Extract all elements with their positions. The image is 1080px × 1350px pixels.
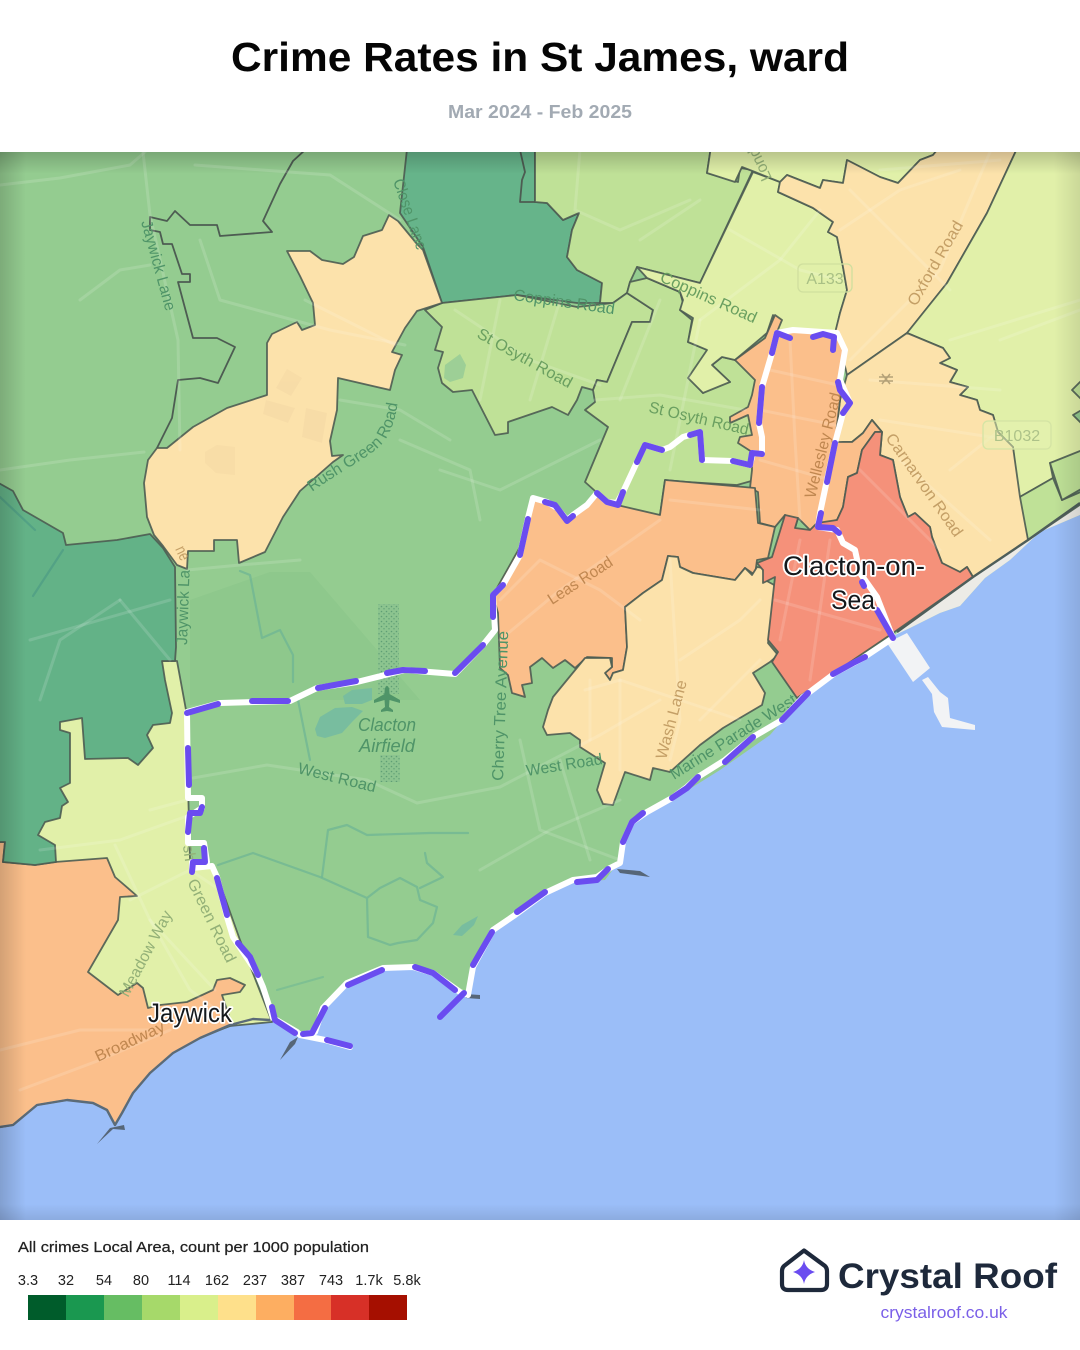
legend title: All crimes Local Area, count per 1000 population — [18, 1239, 369, 1256]
legend tick labels: 387 — [281, 1273, 305, 1289]
legend tick labels: 80 — [133, 1273, 149, 1289]
road shield: B1032 — [983, 421, 1051, 449]
place label: Clacton-on-Sea — [783, 551, 925, 615]
streams — [0, 497, 468, 990]
legend tick labels: 1.7k — [355, 1273, 383, 1289]
local roads — [0, 150, 1080, 1090]
road labels: Jaywick La — [174, 569, 194, 645]
pond — [453, 916, 478, 936]
cream field patches — [205, 369, 327, 475]
St Osyth pond — [444, 354, 466, 382]
icon: railway station — [879, 374, 893, 384]
region: Carnarvon Road cream — [835, 333, 1028, 577]
logo URL: crystalroof.co.uk — [880, 1304, 1008, 1322]
road labels: Oxford Road — [905, 218, 967, 309]
road shield: A133: A133 — [806, 271, 844, 288]
road shield: B1032: B1032 — [994, 428, 1040, 445]
icon: house with star — [782, 1250, 827, 1290]
road labels: West Road — [296, 760, 378, 796]
road labels: Broadway — [93, 1019, 168, 1066]
legend tick labels: 743 — [319, 1273, 343, 1289]
road labels: Leas Road — [545, 554, 616, 608]
airfield label: Airfield — [358, 736, 416, 756]
road labels: ne — [171, 544, 193, 563]
place label: Clacton-on-Sea: Clacton-on- — [783, 551, 925, 581]
region: Jaywick north yellow-green — [30, 661, 272, 1040]
legend — [18, 1239, 421, 1320]
road labels: sh — [179, 844, 198, 862]
legend tick labels — [18, 1273, 421, 1289]
region boundary lines — [0, 150, 1080, 1127]
road labels: Meadow Way — [117, 908, 176, 1000]
road labels: Rush Green Road — [306, 402, 398, 491]
region: east coast light green — [1018, 478, 1080, 540]
airfield field shading — [190, 572, 420, 705]
title: Crime Rates in St James, ward — [231, 34, 849, 80]
road labels: Carnarvon Road — [882, 431, 966, 540]
region: Rush Green cream — [144, 215, 442, 569]
airfield runway — [378, 604, 400, 782]
road labels — [94, 152, 964, 1062]
region: east yellow-green — [907, 140, 1080, 498]
road labels: Close Lane — [389, 177, 429, 252]
ward boundary: St James — [187, 330, 893, 1047]
region: St Osyth Road west light green — [425, 293, 653, 435]
region: Wellesley Road orange — [730, 315, 882, 530]
legend colour scale — [28, 1295, 407, 1320]
legend tick labels: 237 — [243, 1273, 267, 1289]
region: north dark green — [400, 140, 602, 303]
place label: Jaywick: Jaywick — [148, 998, 232, 1028]
road labels: London — [738, 129, 776, 183]
white casing — [187, 330, 893, 1047]
logo: Crystal Roof — [782, 1250, 1057, 1322]
region: south-west orange (Jaywick) — [0, 842, 245, 1128]
pier — [887, 633, 975, 730]
subtitle: date range: Mar 2024 - Feb 2025 — [448, 102, 632, 122]
airfield label: Clacton — [358, 715, 416, 735]
airfield lake — [315, 688, 372, 738]
icon: airfield plane — [374, 686, 400, 712]
road labels: St Osyth Road — [647, 399, 750, 439]
groynes — [97, 869, 650, 1144]
legend tick labels: 3.3 — [18, 1273, 38, 1289]
road labels: Coppins Road — [512, 287, 616, 318]
place label: Clacton-on-Sea: Sea — [831, 585, 876, 615]
legend tick labels: 114 — [167, 1273, 191, 1289]
beach strip — [893, 505, 1080, 636]
region: north light green — [535, 140, 753, 303]
region: Coppins Road yellow-green — [637, 172, 847, 393]
legend tick labels: 32 — [58, 1273, 74, 1289]
region: St Osyth Road east light green — [585, 278, 762, 515]
legend tick labels: 5.8k — [393, 1273, 421, 1289]
road labels: Coppins Road — [657, 269, 759, 327]
road labels: Marine Parade West — [667, 691, 800, 783]
region: west dark green — [0, 481, 176, 865]
region: sea — [0, 515, 1080, 1220]
map edge shading — [0, 152, 1080, 1220]
region: north strip yellow-green — [706, 152, 934, 188]
region: Oxford Road cream — [778, 140, 1021, 375]
region: Wash Lane cream — [543, 556, 778, 805]
road labels: Green Road — [183, 876, 239, 966]
road shield: A133 — [798, 264, 852, 292]
purple dashes — [187, 333, 893, 1046]
airfield label — [358, 718, 416, 752]
region: Clacton centre red-orange — [757, 432, 973, 698]
road labels: Wash Lane — [653, 678, 691, 761]
region: Leas Road orange — [493, 480, 775, 697]
road labels: St Osyth Road — [474, 326, 575, 392]
legend tick labels: 54 — [96, 1273, 112, 1289]
legend tick labels: 162 — [205, 1273, 229, 1289]
road labels: West Road — [525, 751, 604, 780]
road labels: Wellesley Road — [802, 391, 845, 500]
road labels: Cherry Tree Avenue — [490, 631, 512, 781]
road labels: Jaywick Lane — [137, 219, 178, 313]
logo wordmark: Crystal Roof — [838, 1257, 1057, 1296]
